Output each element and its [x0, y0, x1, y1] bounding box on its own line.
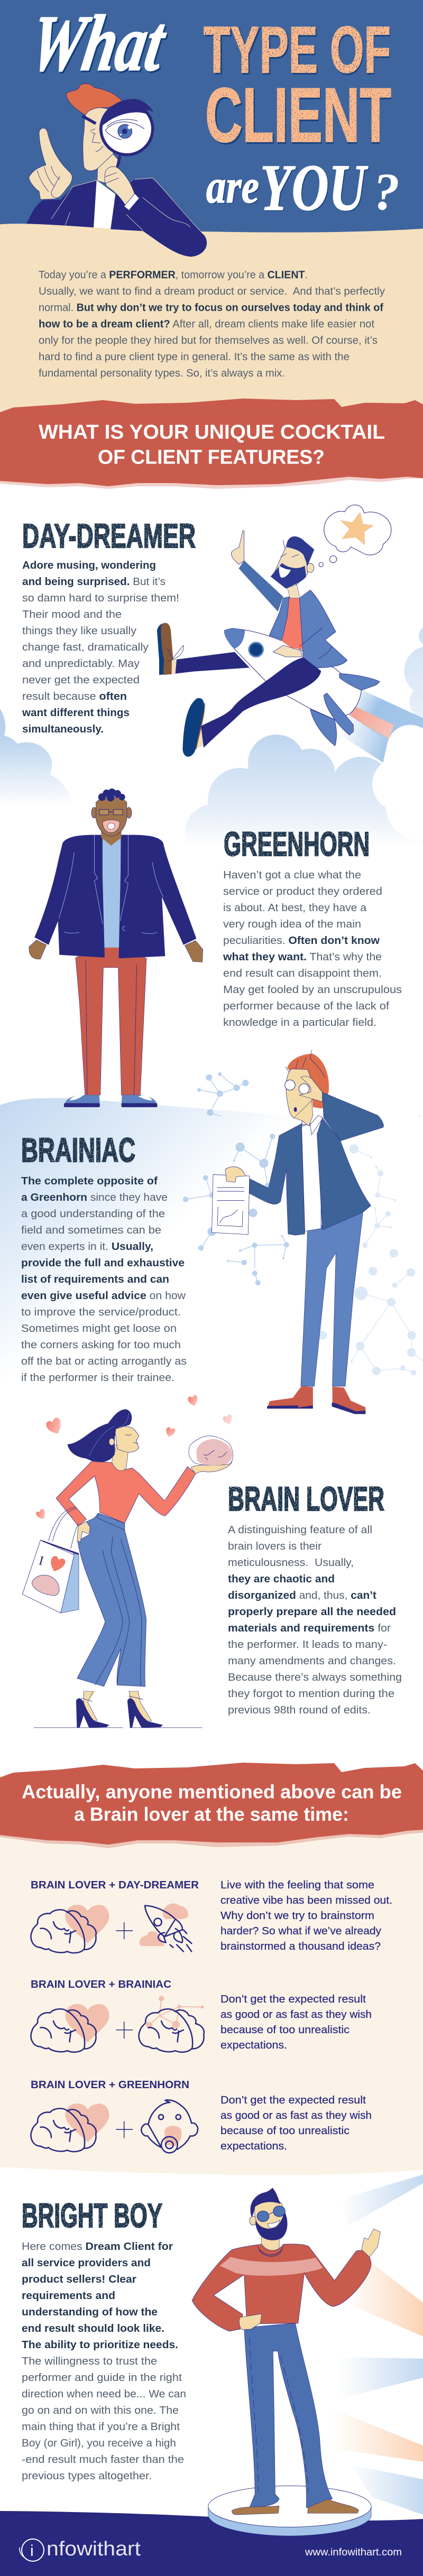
- body: and unpredictably. May: [22, 658, 140, 670]
- description: [220, 1994, 372, 2051]
- body: knowledge in a particular field.: [223, 1017, 376, 1028]
- eyebrow: [82, 116, 96, 124]
- body: main thing that if you’re a Bright: [22, 2421, 180, 2433]
- combination: Brain Lover + Day-Dreamer: [31, 1879, 392, 1953]
- shirt: [282, 597, 304, 650]
- panel: blue header background: [0, 0, 423, 248]
- jacket: [250, 1092, 383, 1235]
- sweater: [192, 2244, 371, 2331]
- body: very rough idea of the main: [223, 919, 361, 930]
- banner heading: [39, 421, 385, 468]
- body: May get fooled by an unscrupulous: [223, 984, 402, 996]
- torso behind cream wave: [26, 180, 115, 232]
- body: service or product they ordered: [223, 886, 382, 897]
- face lines: [125, 1434, 138, 1444]
- body: peculiarities. Often don’t know: [223, 935, 380, 947]
- title: are YOU ?: YOU: [260, 152, 368, 225]
- left cloud: [0, 709, 71, 805]
- neck: [101, 821, 122, 846]
- body: Their mood and the: [22, 609, 122, 620]
- lower legs: [86, 1691, 140, 1700]
- body: even give useful advice on how: [21, 1290, 186, 1302]
- body: the performer. It leads to many-: [228, 1639, 387, 1651]
- raised sleeve: [239, 560, 283, 611]
- description: Live with the feeling that some: [220, 1879, 374, 1891]
- blue hill background with molecules: [0, 1072, 423, 1398]
- illustration: Brain Lover woman: [22, 1395, 234, 1700]
- title: are YOU ?: [206, 152, 400, 226]
- neck: [112, 1444, 128, 1471]
- magnifier handle: [116, 156, 120, 173]
- body: want different things: [22, 707, 130, 719]
- shirt cuff: [124, 193, 139, 210]
- hill: [0, 1098, 297, 1398]
- illustration: Greenhorn man: [29, 789, 203, 1107]
- neck: [294, 1100, 313, 1126]
- collar: [301, 1115, 323, 1135]
- heading: BRAINIAC: [21, 1131, 135, 1169]
- light rays: [332, 2174, 423, 2515]
- intro paragraph: fundamental personality types. So, it’s always a mix.: [39, 368, 285, 379]
- open mouth: [103, 820, 120, 833]
- text: Day-Dreamer: [22, 517, 196, 735]
- right hand: [185, 941, 203, 962]
- trousers: [76, 946, 146, 1095]
- face: [286, 1069, 316, 1118]
- body: The complete opposite of: [21, 1175, 158, 1187]
- body: The willingness to trust the: [22, 2356, 157, 2367]
- description: [220, 2095, 372, 2152]
- title: are YOU ?: ?: [373, 162, 400, 221]
- icons: brain plus rocket: [31, 1903, 191, 1953]
- body: performer and guide in the right: [22, 2372, 182, 2384]
- waistband: [97, 1513, 125, 1530]
- floating hearts: [35, 1395, 234, 1521]
- rocket window: [249, 643, 263, 656]
- body: A distinguishing feature of all: [228, 1524, 372, 1536]
- body: Boy (or Girl), you receive a high: [22, 2438, 176, 2449]
- intro paragraph: hard to find a pure client type in general. It’s the same as with the: [39, 351, 350, 363]
- rocket fins: [310, 673, 380, 746]
- description: as good or as fast as they wish: [220, 2110, 372, 2121]
- intro paragraph: [39, 270, 385, 379]
- raised shoe: [157, 623, 183, 675]
- body: [21, 1175, 187, 1384]
- body: many amendments and changes.: [228, 1655, 396, 1667]
- jacket highlight lines: [126, 178, 204, 235]
- footer logo: infowithart: [20, 2538, 141, 2561]
- body: [223, 869, 402, 1028]
- body: Here comes Dream Client for: [22, 2241, 173, 2253]
- description: creative vibe has been missed out.: [220, 1895, 392, 1906]
- description: brainstormed a thousand ideas?: [220, 1941, 381, 1952]
- open hand: [191, 1461, 232, 1474]
- body: requirements and: [22, 2290, 115, 2302]
- body: all service providers and: [22, 2257, 151, 2269]
- shoes: [64, 1095, 157, 1107]
- platform: [208, 2486, 371, 2536]
- beard: [271, 563, 306, 589]
- neck: [97, 154, 120, 186]
- body: simultaneously.: [22, 724, 104, 735]
- text: Brain Lover: [228, 1480, 402, 1716]
- body: never get the expected: [22, 674, 140, 686]
- body: [22, 560, 179, 735]
- description: Why don’t we try to brainstorm: [220, 1910, 374, 1922]
- label: BRAIN LOVER + DAY-DREAMER: [31, 1879, 199, 1891]
- body: previous types altogether.: [22, 2470, 152, 2482]
- intro paragraph: how to be a dream client? After all, dream clients make life easier not: [39, 318, 374, 330]
- hand pointing up: [29, 128, 72, 200]
- hair: [66, 84, 123, 115]
- body: [228, 1524, 402, 1716]
- earring and ear: [109, 1438, 115, 1454]
- title: are YOU ?: YOU: [261, 153, 369, 226]
- trousers: [301, 1212, 363, 1386]
- raised hand: [232, 531, 244, 564]
- title: are YOU ?: are: [206, 161, 259, 213]
- jeans: [244, 2323, 333, 2508]
- left jacket: [34, 835, 105, 958]
- body: and being surprised. But it’s: [22, 576, 165, 588]
- hand on hip: [239, 2314, 262, 2330]
- description: Don’t get the expected result: [220, 1994, 366, 2005]
- text: Bright Boy: [22, 2197, 186, 2482]
- hair highlight: [89, 1413, 129, 1456]
- body: understanding of how the: [22, 2306, 158, 2318]
- rocket nose: [224, 628, 245, 649]
- body: so damn hard to surprise them!: [22, 592, 179, 604]
- jacket arm: [111, 178, 207, 257]
- footer logo: infowithart: i: [30, 2542, 34, 2560]
- body: disorganized and, thus, can’t: [228, 1590, 376, 1601]
- brain in hand: [189, 1436, 233, 1466]
- right jacket: [118, 835, 196, 958]
- eyes: [281, 540, 299, 557]
- hand holding handle: [105, 166, 135, 206]
- neck: [287, 585, 300, 598]
- illustration: man with magnifying glass: [0, 84, 423, 423]
- ear: [250, 2216, 256, 2225]
- body: they forgot to mention during the: [228, 1688, 394, 1700]
- body: performer because of the lack of: [223, 1000, 389, 1012]
- glasses: [99, 810, 123, 815]
- left hand: [29, 940, 47, 959]
- face: [255, 2200, 286, 2234]
- jeans stitching: [250, 2338, 309, 2491]
- banner: second torn red band: [0, 1763, 423, 1848]
- body: Because there’s always something: [228, 1672, 402, 1683]
- heading: DAY-DREAMER: [22, 517, 196, 555]
- face: [272, 546, 308, 585]
- description: because of too unrealistic: [220, 2125, 350, 2137]
- body: what they want. That’s why the: [223, 951, 382, 963]
- hand on hip: [77, 1522, 90, 1542]
- title: What: What: [25, 1, 174, 89]
- body: Haven’t got a clue what the: [223, 869, 361, 881]
- faint molecule network: [318, 1115, 423, 1376]
- mouth: [279, 566, 291, 578]
- title: What: What: [24, 0, 172, 87]
- trousers: [77, 1513, 146, 1687]
- raised hand: [362, 2229, 380, 2257]
- body: brain lovers is their: [228, 1541, 321, 1552]
- banner heading: Actually, anyone mentioned above can be: [22, 1781, 402, 1802]
- white cloud: [372, 725, 423, 841]
- fist finger lines: [37, 166, 60, 198]
- sweater: [56, 1461, 196, 1526]
- icons: brain plus molecule brain: [31, 1996, 204, 2052]
- intro paragraph: Today you’re a PERFORMER, tomorrow you’re a CLIENT.: [39, 270, 308, 281]
- shopping bag: [22, 1507, 79, 1613]
- body: end result should look like.: [22, 2323, 164, 2334]
- body: [22, 2241, 186, 2482]
- description: [220, 1879, 392, 1952]
- body: off the bat or acting arrogantly as: [21, 1356, 187, 1367]
- hair: [286, 536, 314, 566]
- beard: [255, 2211, 287, 2240]
- description: as good or as fast as they wish: [220, 2009, 372, 2021]
- ear: [307, 563, 314, 572]
- curly hair: [98, 789, 125, 801]
- body: things they like usually: [22, 625, 136, 637]
- illustration: high heels: [34, 1691, 203, 1728]
- hand at glasses: [299, 1076, 323, 1102]
- banner heading: OF CLIENT FEATURES?: [98, 446, 325, 468]
- footer logo: infowithart: nfowithart: [47, 2538, 141, 2560]
- body: Sometimes might get loose on: [21, 1323, 177, 1335]
- sunglasses: [257, 2206, 285, 2221]
- body: change fast, dramatically: [22, 642, 149, 653]
- banner: torn red band: [0, 399, 423, 489]
- big right cloud: [185, 735, 423, 868]
- body: go on and on with this one. The: [22, 2405, 179, 2416]
- body: the corners asking for too much: [21, 1339, 181, 1351]
- main trouser leg: [201, 657, 321, 748]
- smile: [268, 2220, 280, 2228]
- banner heading: a Brain lover at the same time:: [74, 1803, 349, 1825]
- description: because of too unrealistic: [220, 2024, 350, 2036]
- cream wave: [0, 224, 423, 423]
- illustration: Brainiac man: [212, 1050, 383, 1414]
- rocket trail: [337, 690, 423, 763]
- body: provide the full and exhaustive: [21, 1257, 185, 1269]
- label: BRAIN LOVER + BRAINIAC: [31, 1978, 171, 1990]
- I heart text on bag: I: [38, 1553, 45, 1569]
- hair: [250, 2188, 281, 2217]
- illustration: Bright Boy with rays: [192, 2174, 423, 2536]
- glasses: [285, 1080, 309, 1094]
- description: harder? So what if we’ve already: [220, 1925, 381, 1937]
- enlarged hair: [101, 99, 153, 127]
- description: expectations.: [220, 2141, 287, 2152]
- text: Brainiac: [21, 1131, 187, 1384]
- sweater collar: [258, 2247, 283, 2256]
- body: materials and requirements for: [228, 1623, 391, 1634]
- label: BRAIN LOVER + GREENHORN: [31, 2079, 189, 2091]
- description: Don’t get the expected result: [220, 2095, 366, 2106]
- intro paragraph: only for the people they hired but for themselves as well. Of course, it’s: [39, 335, 378, 347]
- combination: Brain Lover + Brainiac: [31, 1978, 372, 2052]
- rocket body: [224, 628, 362, 719]
- jacket details: [59, 835, 163, 934]
- body: field and sometimes can be: [21, 1225, 161, 1236]
- combination: Brain Lover + Greenhorn: [31, 2079, 372, 2153]
- footer navy band: [0, 2511, 423, 2576]
- body: end result can disappoint them.: [223, 968, 382, 979]
- front trouser leg: [176, 652, 250, 673]
- sweater stripe: [220, 2257, 323, 2276]
- intro paragraph: Usually, we want to find a dream product or service. And that’s perfectly: [39, 285, 385, 297]
- body: -end result much faster than the: [22, 2454, 184, 2466]
- hair: [68, 1409, 132, 1462]
- footer url: www.infowithart.com: [305, 2547, 402, 2558]
- ears: [91, 808, 132, 818]
- body: is about. At best, they have a: [223, 902, 367, 914]
- body: direction when need be... We can: [22, 2388, 186, 2400]
- text: Greenhorn: [223, 825, 402, 1028]
- neck: [261, 2230, 279, 2251]
- hand holding document: [225, 1167, 245, 1182]
- body: a good understanding of the: [21, 1208, 165, 1220]
- lower shoe: [182, 698, 205, 757]
- enlarged eye: [105, 119, 144, 140]
- banner heading: [22, 1781, 402, 1825]
- banner heading: WHAT IS YOUR UNIQUE COCKTAIL: [39, 421, 385, 443]
- head: [115, 1426, 139, 1452]
- molecule network: [183, 1072, 289, 1285]
- body: properly prepare all the needed: [228, 1606, 396, 1618]
- body: The ability to prioritize needs.: [22, 2339, 178, 2351]
- body: product sellers! Clear: [22, 2274, 136, 2285]
- heading: BRIGHT BOY: [22, 2197, 162, 2235]
- thought bubble: [319, 505, 391, 567]
- icons: brain plus baby: [31, 2100, 198, 2153]
- trouser creases: [95, 1537, 142, 1686]
- body: result because often: [22, 691, 127, 702]
- hair: [287, 1054, 329, 1108]
- panel: cream combinations section: [0, 1834, 423, 2175]
- magnifier lens: [101, 103, 153, 155]
- face: [83, 108, 113, 171]
- body: to improve the service/product.: [21, 1306, 181, 1318]
- body: Adore musing, wondering: [22, 560, 156, 571]
- shirt: [301, 1120, 321, 1231]
- document: [212, 1174, 250, 1235]
- body: meticulousness. Usually,: [228, 1557, 354, 1569]
- hand on rocket: [273, 645, 302, 657]
- body: even experts in it. Usually,: [21, 1241, 153, 1253]
- shirt: [102, 835, 121, 948]
- description: expectations.: [220, 2040, 287, 2051]
- title: are YOU ?: are: [207, 162, 260, 214]
- body: a Greenhorn since they have: [21, 1192, 168, 1203]
- clouds and rocket rider: [0, 505, 423, 868]
- shoes: [267, 1386, 365, 1414]
- jacket: [269, 590, 347, 668]
- face lines: [90, 129, 103, 152]
- body: they are chaotic and: [228, 1573, 335, 1585]
- right edge cloud: [404, 626, 423, 719]
- shoes: [232, 2499, 359, 2515]
- body: list of requirements and can: [21, 1274, 169, 1285]
- intro paragraph: normal. But why don’t we try to focus on ourselves today and think of: [39, 302, 383, 314]
- body: if the performer is their trainee.: [21, 1372, 174, 1384]
- mouth: [294, 1107, 297, 1112]
- body: previous 98th round of edits.: [228, 1704, 371, 1716]
- head: [96, 798, 127, 836]
